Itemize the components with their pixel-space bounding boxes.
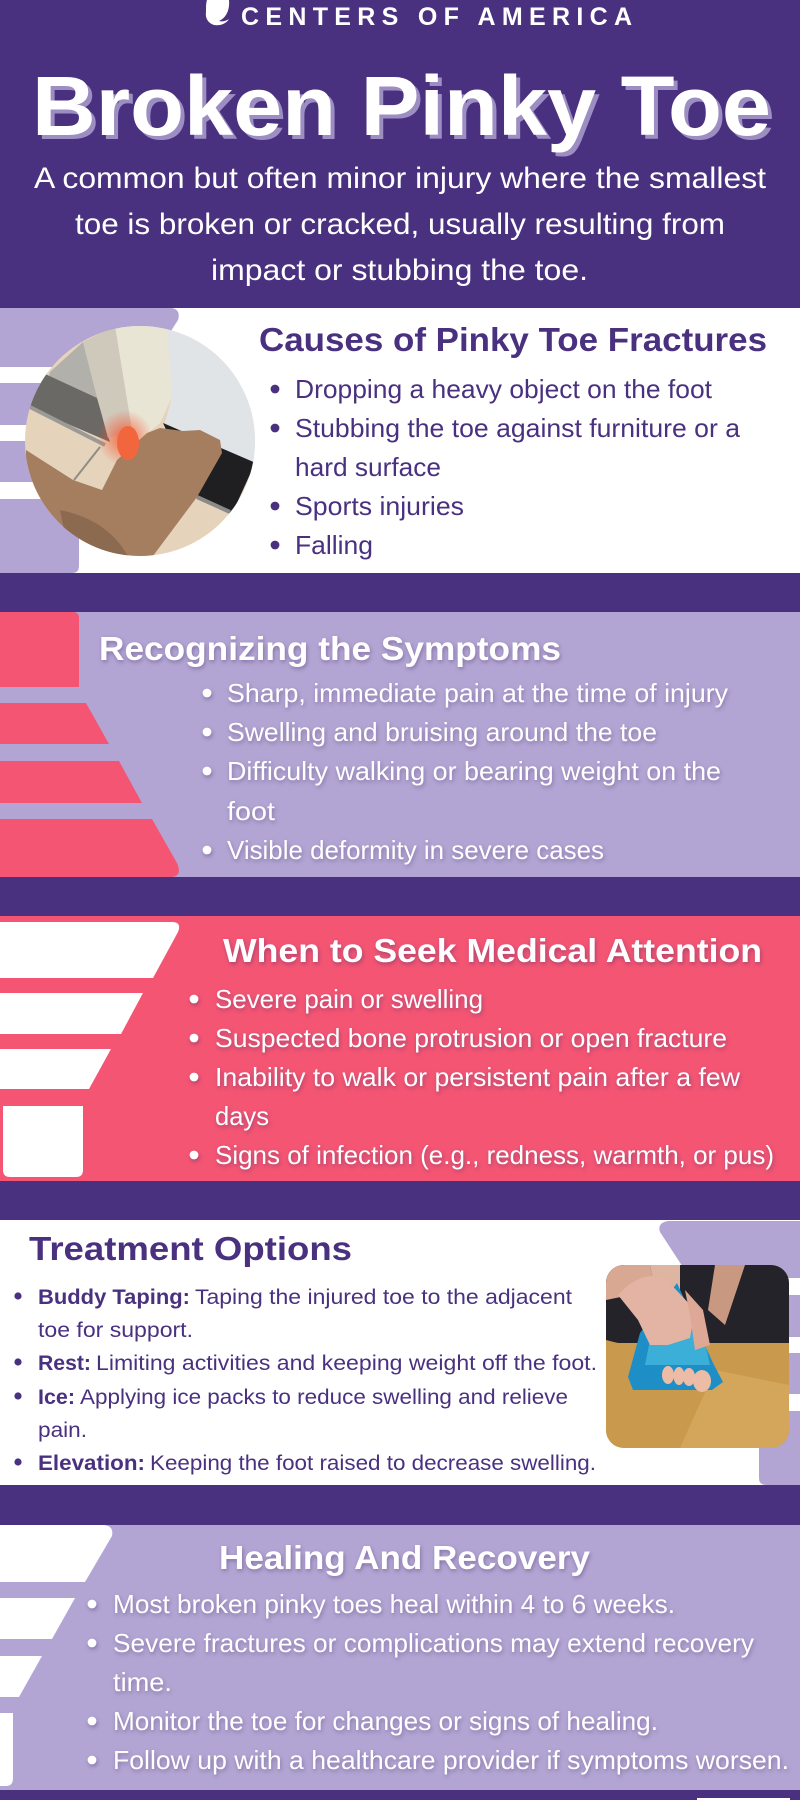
bullet list: Follow up with a healthcare provider if symptoms worsen. <box>113 1745 789 1775</box>
bullet list: Falling <box>295 530 373 560</box>
panel: treatment options <box>0 1220 800 1485</box>
bullet list <box>88 1589 789 1775</box>
subtitle <box>34 162 767 287</box>
header <box>32 0 775 287</box>
title: Broken Pinky Toe <box>32 59 771 153</box>
heading: Recognizing the Symptoms <box>99 630 561 667</box>
decorative white steps <box>0 1525 112 1786</box>
bullet list: time. <box>113 1667 172 1697</box>
decorative pink steps <box>0 612 179 877</box>
panel: symptoms <box>0 612 800 877</box>
bullet list: Dropping a heavy object on the foot <box>295 374 713 404</box>
bullet list: Sharp, immediate pain at the time of injury <box>227 678 728 708</box>
bullet list: Inability to walk or persistent pain after a few <box>215 1062 740 1092</box>
bullet list: Rest: <box>38 1351 91 1375</box>
bullet list: Swelling and bruising around the toe <box>227 717 657 747</box>
heading: Treatment Options <box>29 1230 352 1267</box>
bullet list: foot <box>227 796 276 826</box>
subtitle: impact or stubbing the toe. <box>211 254 588 287</box>
bullet list: pain. <box>38 1418 87 1442</box>
bullet list: days <box>215 1101 269 1131</box>
bullet list <box>203 678 728 865</box>
bullet list: toe for support. <box>38 1318 193 1342</box>
bullet list: Suspected bone protrusion or open fracture <box>215 1023 727 1053</box>
photo: ice pack on foot <box>606 1265 789 1448</box>
icon: logo moon <box>206 0 229 25</box>
bullet list: Most broken pinky toes heal within 4 to 6 weeks. <box>113 1589 675 1619</box>
decorative white steps <box>0 922 179 1177</box>
heading: When to Seek Medical Attention <box>223 932 762 969</box>
bullet list: Monitor the toe for changes or signs of healing. <box>113 1706 658 1736</box>
bullet list <box>14 1285 597 1475</box>
bullet list: Limiting activities and keeping weight off the foot. <box>96 1351 597 1375</box>
bullet list: Ice: <box>38 1385 75 1409</box>
bullet list: Severe fractures or complications may extend recovery <box>113 1628 754 1658</box>
logo <box>206 0 632 31</box>
bullet list: Keeping the foot raised to decrease swelling. <box>150 1451 596 1475</box>
title: Broken Pinky Toe <box>36 63 775 157</box>
photo: toe stubbed on door frame <box>25 326 256 560</box>
panel: when to seek medical attention <box>0 916 800 1181</box>
logo text: CENTERS OF AMERICA <box>241 3 632 31</box>
decorative lilac steps <box>0 308 179 573</box>
footer white tab <box>697 1798 790 1800</box>
bullet list: Difficulty walking or bearing weight on the <box>227 756 721 786</box>
bullet list: Signs of infection (e.g., redness, warmth, or pus) <box>215 1140 774 1170</box>
bullet list: Sports injuries <box>295 491 464 521</box>
panel: causes <box>0 308 800 573</box>
decorative lilac steps <box>659 1221 800 1485</box>
panel: healing and recovery <box>0 1525 800 1790</box>
subtitle: A common but often minor injury where the smallest <box>34 162 767 195</box>
heading: Causes of Pinky Toe Fractures <box>259 321 767 358</box>
bullet list: Severe pain or swelling <box>215 984 483 1014</box>
bullet list <box>190 984 774 1170</box>
subtitle: toe is broken or cracked, usually resulting from <box>75 208 725 241</box>
bullet list: Stubbing the toe against furniture or a <box>295 413 741 443</box>
bullet list: Elevation: <box>38 1451 145 1475</box>
heading: Healing And Recovery <box>219 1539 591 1576</box>
bullet list: Buddy Taping: <box>38 1285 190 1309</box>
bullet list: Visible deformity in severe cases <box>227 835 604 865</box>
bullet list: Taping the injured toe to the adjacent <box>195 1285 572 1309</box>
bullet list: hard surface <box>295 452 441 482</box>
bullet list <box>271 374 741 560</box>
bullet list: Applying ice packs to reduce swelling and relieve <box>80 1385 568 1409</box>
